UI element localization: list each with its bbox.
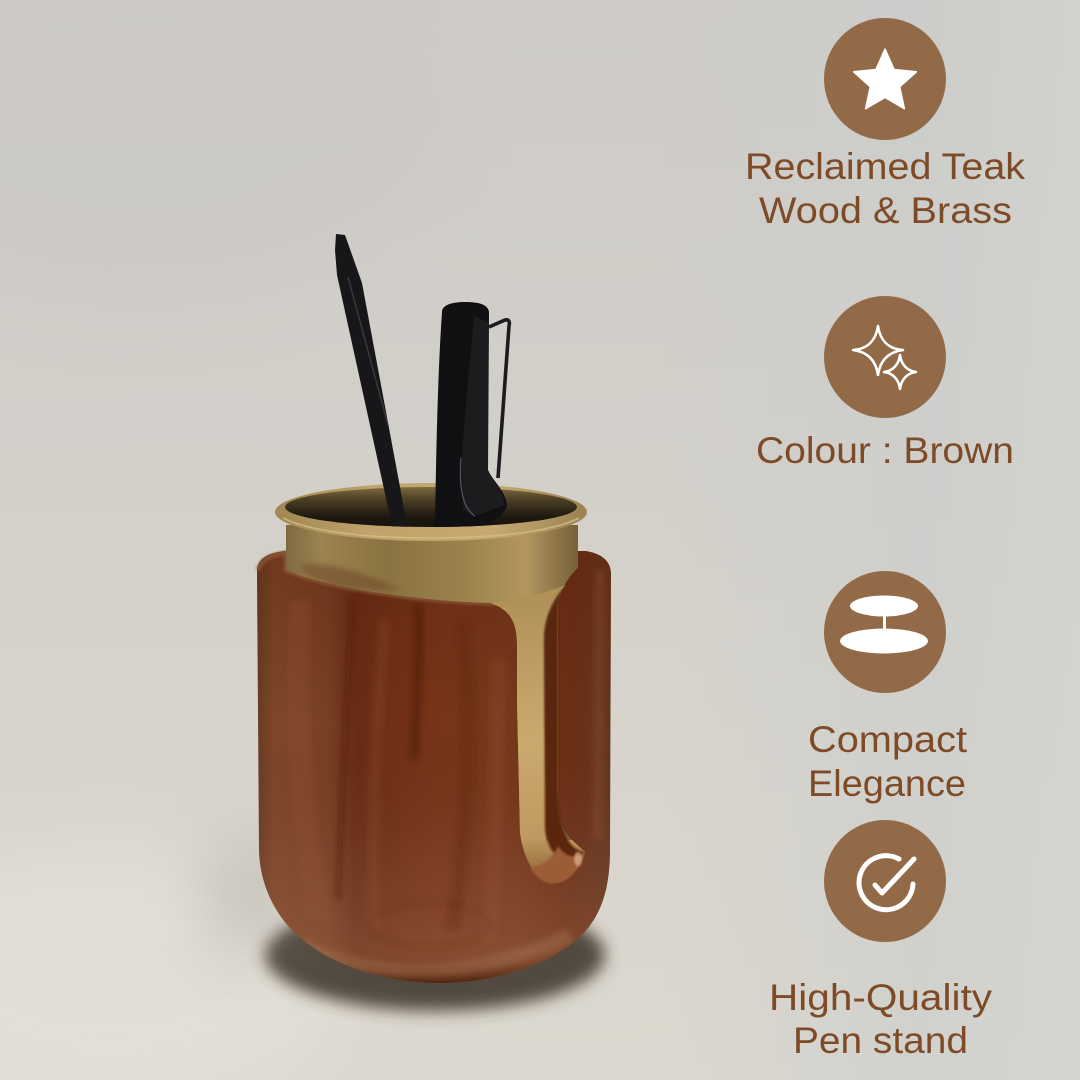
bright brass strip (490, 585, 585, 883)
cast shadow (210, 840, 605, 1011)
icon: sparkles (824, 296, 946, 418)
label: High-Quality Pen stand: Pen stand (793, 1020, 968, 1061)
black fountain pen (435, 302, 509, 530)
slot highlight (574, 852, 582, 866)
cup rim and interior (275, 483, 587, 541)
slot lower wood lip (530, 846, 585, 883)
pens inside cup (335, 234, 509, 530)
icon: check mark (824, 820, 946, 942)
label: Reclaimed Teak Wood & Brass: Wood & Brass (759, 190, 1012, 231)
feature: colour (756, 296, 1014, 471)
icon: tiered stand (824, 571, 946, 693)
wood grain (299, 570, 600, 970)
wood top lip (258, 553, 497, 603)
icon: star (824, 18, 946, 140)
label: Colour : Brown: Colour : Brown (756, 430, 1014, 471)
brass cup body and strip (286, 525, 585, 883)
brass reflection of wood (300, 564, 400, 590)
slot groove (544, 582, 585, 858)
black pencil (335, 234, 408, 530)
feature: compact (808, 571, 968, 804)
label: Compact Elegance: Compact (808, 719, 968, 760)
label: Reclaimed Teak Wood & Brass (745, 146, 1026, 231)
label: High-Quality Pen stand: High-Quality (769, 977, 993, 1018)
label: Compact Elegance (808, 719, 968, 804)
feature: quality (769, 820, 993, 1061)
wood silhouette (257, 551, 611, 983)
label: Reclaimed Teak Wood & Brass: Reclaimed Teak (745, 146, 1026, 187)
pen stand photo (210, 234, 611, 1011)
feature: material (745, 18, 1026, 231)
label: Compact Elegance: Elegance (808, 763, 966, 804)
label: High-Quality Pen stand (769, 977, 993, 1061)
